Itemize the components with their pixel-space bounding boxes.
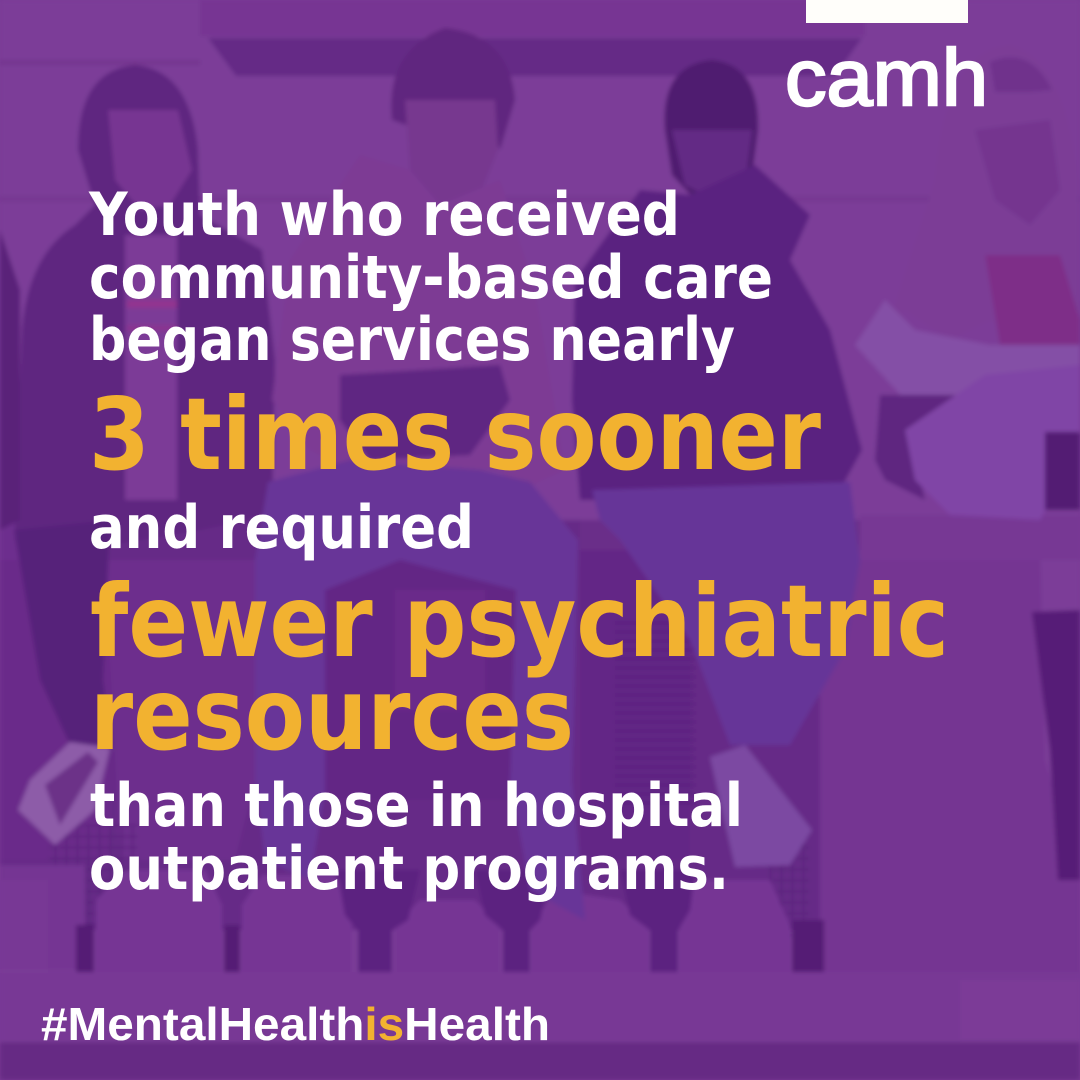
lower wall with balusters (0, 515, 1080, 1080)
headline text block (88, 180, 773, 375)
line: Youth who received: Youth who received (88, 180, 680, 250)
camh logo: camh (785, 33, 988, 122)
highlight: fewer psychiatric resources (90, 563, 949, 773)
person: right girl (855, 45, 1080, 880)
person: second youth (255, 28, 585, 920)
text: and required: and required (89, 493, 474, 563)
person: left girl (0, 65, 275, 845)
closing text: than those in hospital outpatient programs: than those in hospital (90, 771, 743, 841)
person: third youth (572, 60, 862, 867)
closing text: than those in hospital outpatient programs: outpatient programs. (89, 834, 729, 904)
hashtag: #MentalHealth isHealth (41, 998, 550, 1050)
closing text: than those in hospital outpatient programs (89, 771, 743, 904)
white tab at top (806, 0, 968, 23)
highlight: fewer psychiatric resources: resources (90, 656, 574, 773)
highlight: 3 times sooner: 3 times sooner (89, 376, 822, 493)
line: began services nearly: began services nearly (89, 305, 735, 375)
wall details (0, 0, 1080, 202)
highlight: fewer psychiatric resources: fewer psychiatric (90, 563, 949, 680)
line: community-based care: community-based care (89, 243, 773, 313)
